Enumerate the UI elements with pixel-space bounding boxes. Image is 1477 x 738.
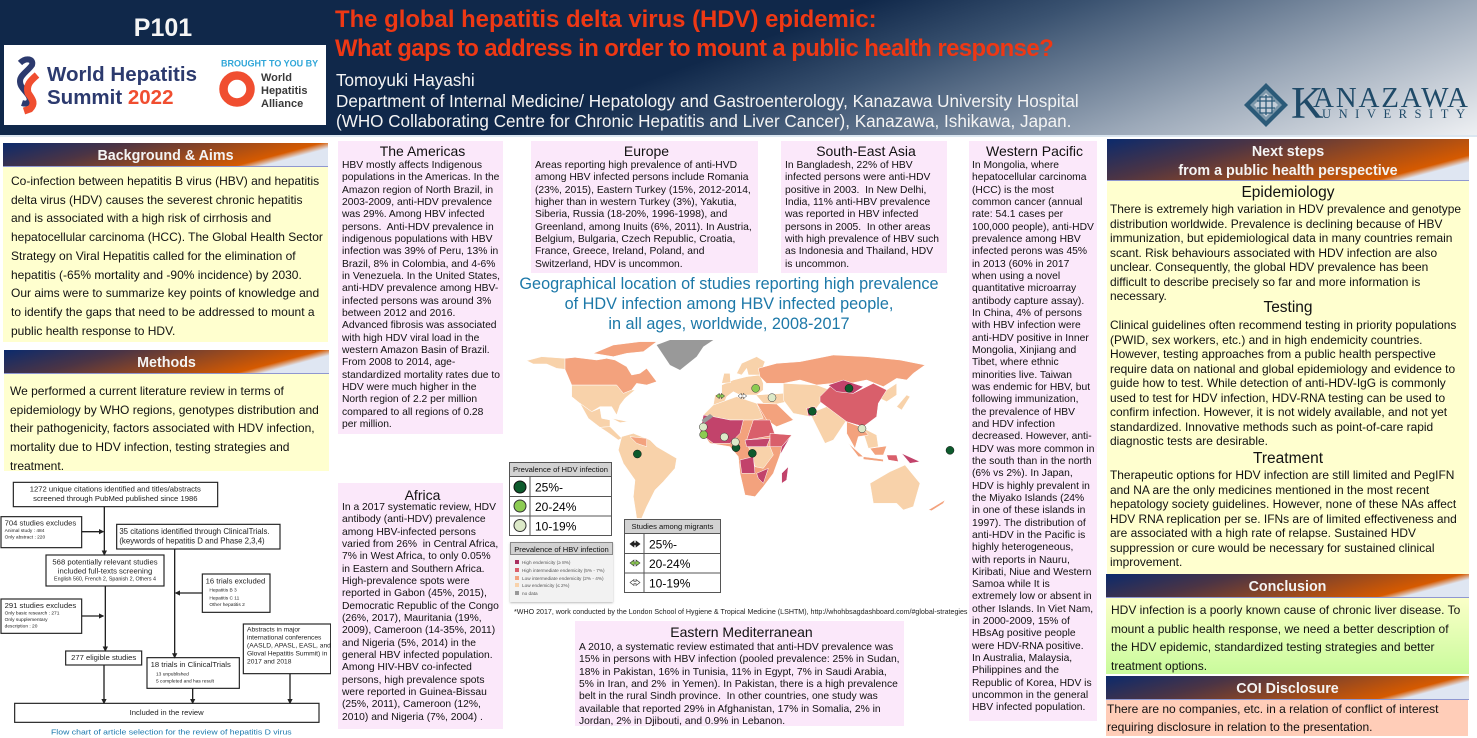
land: low intermediate endemicity <box>565 342 945 511</box>
flow chart of article selection: 704 studies excludes <box>5 518 76 527</box>
panel: Western Pacific: highly heterogeneous, <box>972 542 1073 553</box>
text: testing: Clinical guidelines often recommend testing in priority populations <box>1110 318 1456 332</box>
panel: Eastern Mediterranean: belt in the rural Sindh province. In other countries, one study was <box>579 691 878 702</box>
flow chart of article selection: 35 citations identified through ClinicalTrials. <box>119 527 270 536</box>
logo panel: World Hepatitis Summit 2022: Alliance <box>261 98 303 110</box>
panel: Western Pacific: Mongolia, Xinjiang and <box>972 345 1076 356</box>
panel: Western Pacific: was endemic for HBV, but <box>972 382 1090 393</box>
panel: Western Pacific: (6% vs 2%). In Japan, <box>972 468 1073 479</box>
panel: Eastern Mediterranean: Jordan, 2% in Djibouti, and 0.9% in Lebanon. <box>579 716 785 727</box>
panel: conclusion: treatment options. <box>1111 659 1207 673</box>
flow chart of article selection: (AASLD, APASL, EASL, and <box>247 643 331 650</box>
panel: Africa: (26%, 2017), Mauritania (19%, <box>342 613 482 624</box>
panel: Western Pacific: In Mongolia, where <box>972 160 1059 171</box>
flow chart of article selection: 2017 and 2018 <box>247 659 292 666</box>
panel: Western Pacific: in 2013 (60% in 2017 <box>972 259 1069 270</box>
authors and affiliation: Department of Internal Medicine/ Hepatology and Gastroenterology, Kanazawa University Hospital <box>336 92 1079 110</box>
flow chart of article selection: Only basic research : 271 <box>5 611 60 617</box>
logo panel: World Hepatitis Summit 2022: World <box>261 72 292 84</box>
legend: studies among migrants: 10-19% <box>649 576 691 590</box>
text: testing: require data on national and global epidemiology and evidence to <box>1110 362 1455 376</box>
panel: The Americas: infection was 39% of Peru, 13% in <box>342 246 498 257</box>
legend: prevalence of HBV infection: no data <box>522 591 538 596</box>
heading: Next steps: from a public health perspective <box>1178 162 1398 178</box>
text: treatment: are associated with a high rate of relapse. Sustained HDV <box>1110 526 1416 540</box>
text: epidemiology: immunization, but epidemiological data in many countries remain <box>1110 231 1452 245</box>
panel: Western Pacific: following immunization, <box>972 394 1078 405</box>
flow chart of article selection: international conferences <box>247 635 322 642</box>
text: epidemiology: distribution worldwide. Prevalence is declining because of HBV <box>1110 217 1442 231</box>
panel: methods text: epidemiology by WHO regions, genotypes distribution and <box>10 403 319 417</box>
panel: Western Pacific: HBV infected population. <box>972 702 1085 713</box>
panel: Africa: High-prevalence spots were <box>342 576 470 587</box>
panel: The Americas: populations in the Americas. In the <box>342 172 499 183</box>
text: treatment: suppression or cure would be necessary for sustained clinical <box>1110 541 1434 555</box>
panel: The Americas: compared to all regions of 0.28 <box>342 407 483 418</box>
panel: Africa: among HBV-infected persons <box>342 527 476 538</box>
panel: The Americas: persons. Anti-HDV prevalence in <box>342 222 494 233</box>
flow chart of article selection: Only abstract : 220 <box>5 534 46 540</box>
panel: South-East Asia <box>781 141 947 273</box>
flow chart of article selection: Hepatitis B 3 <box>209 588 237 594</box>
panel: South-East Asia: as Indonesia and Thailand, HDV <box>785 246 933 257</box>
panel: Western Pacific: uncommon in the general <box>972 690 1088 701</box>
panel: background and aims text: Strategy on Viral Hepatitis called for the elimination of <box>11 249 296 263</box>
panel: Western Pacific: In China, 4% of persons <box>972 308 1082 319</box>
no data: Western Sahara <box>702 414 713 423</box>
subheading: Treatment: Treatment <box>1253 450 1323 467</box>
heading: Eastern Mediterranean: Eastern Mediterranean <box>670 624 813 640</box>
legend: prevalence of HBV infection: Low intermediate endemicity (2% - 4%) <box>522 576 604 581</box>
panel: Western Pacific: minorities live. Taiwan <box>972 370 1072 381</box>
text: testing: However, testing approaches from a public health perspective <box>1110 347 1436 361</box>
panel: methods text: We performed a current literature review in terms of <box>10 384 284 398</box>
panel: Western Pacific: hepatocellular carcinoma <box>972 172 1086 183</box>
legend: prevalence of HBV infection: Low endemicity (≤ 2%) <box>522 583 570 588</box>
panel: The Americas: Brazil, 8% in Colombia, and 4-6% <box>342 259 495 270</box>
panel: South-East Asia: persons in 2005. In other areas <box>785 222 930 233</box>
panel: methods text <box>4 374 329 471</box>
flow chart of article selection: 13 unpublished <box>156 671 189 677</box>
panel: Europe: France, Greece, Ireland, Poland, and <box>535 246 704 257</box>
panel: Western Pacific: rate: 54.1 cases per <box>972 209 1063 220</box>
heading: South-East Asia: South-East Asia <box>816 143 916 159</box>
flow chart of article selection: 18 trials in ClinicalTrials <box>151 660 231 669</box>
panel: South-East Asia: India, 11% anti-HBV prevalence <box>785 197 930 208</box>
flow chart of article selection: 16 trials excluded <box>206 577 265 586</box>
legend: studies among migrants: 20-24% <box>649 557 691 571</box>
panel: The Americas: indigenous populations with HBV <box>342 234 493 245</box>
panel: Europe: higher than in western Turkey (3%), Yakutia, <box>535 197 737 208</box>
flow chart of article selection <box>0 482 331 736</box>
heading: COI Disclosure: COI Disclosure <box>1236 681 1339 697</box>
map title <box>519 275 939 333</box>
authors and affiliation: (WHO Collaborating Centre for Chronic Hepatitis and Liver Cancer), Kanazawa, Ishikawa, Japan. <box>336 112 1071 131</box>
logo panel: World Hepatitis Summit 2022: Hepatitis <box>261 85 307 97</box>
text: epidemiology: There is extremely high variation in HDV prevalence and genotype <box>1110 202 1461 216</box>
text: epidemiology: necessary. <box>1110 289 1167 303</box>
panel: Western Pacific: Kiribati, Niue and Western <box>972 567 1091 578</box>
panel: Western Pacific: extremely low or absent in <box>972 591 1092 602</box>
heading: Methods: Methods <box>137 355 196 371</box>
panel: COI disclosure: There are no companies, etc. in a relation of conflict of interest <box>1107 702 1439 716</box>
panel: Western Pacific: decreased. However, anti- <box>972 431 1092 442</box>
panel: The Americas: between 2012 and 2016. <box>342 308 455 319</box>
legend: prevalence of HBV infection <box>510 542 613 602</box>
panel: Africa: In a 2017 systematic review, HDV <box>342 502 496 513</box>
panel: Western Pacific: 1997). The distribution of <box>972 518 1086 529</box>
panel: Eastern Mediterranean: 5% in Iran, and 2% in Yemen). In Pakistan, there is a high prevalence <box>579 679 898 690</box>
panel: Western Pacific: quantitative microarray <box>972 283 1076 294</box>
panel: South-East Asia: was reported in HBV infected <box>785 209 918 220</box>
panel: Europe: Areas reporting high prevalence of anti-HVD <box>535 160 737 171</box>
header banner <box>0 0 1477 137</box>
panel: Europe: Belgium, Bulgaria, Czech Republic, Croatia, <box>535 234 735 245</box>
heading: The Americas: The Americas <box>380 143 465 159</box>
panel: South-East Asia: with high prevalence of HBV such <box>785 234 939 245</box>
text: testing: used to test for HDV infection, HDV-RNA testing can be used to <box>1110 391 1445 405</box>
logo panel: World Hepatitis Summit 2022: World Hepatitis <box>47 63 197 86</box>
panel: Western Pacific: with HBV infection were <box>972 320 1081 331</box>
text: testing <box>1110 318 1456 448</box>
legend: studies among migrants: Studies among migrants <box>632 522 713 531</box>
panel: Eastern Mediterranean: available that reported 29% in Afghanistan, 17% in Somalia, 2% in <box>579 704 881 715</box>
heading: Next steps: Next steps <box>1252 144 1324 160</box>
panel: Africa: varied from 26% in Central Africa, <box>342 539 498 550</box>
panel: The Americas <box>338 141 503 434</box>
text: testing: standardized. Innovative methods such as point-of-care rapid <box>1110 420 1433 434</box>
logo panel: World Hepatitis Summit 2022: Summit 2022 <box>47 86 173 109</box>
panel: background and aims text: delta virus (HDV) causes the severest chronic hepatitis <box>11 193 302 207</box>
flow chart of article selection: screened through PubMed published since 1986 <box>33 494 197 503</box>
panel: Africa: and Nigeria (5%, 2014) in the <box>342 638 476 649</box>
heading: Background & Aims: Background & Aims <box>97 148 234 164</box>
authors and affiliation: Tomoyuki Hayashi <box>336 71 475 90</box>
subheading: Testing: Testing <box>1263 299 1313 316</box>
legend: prevalence of HBV infection: Prevalence of HBV infection <box>514 545 609 554</box>
study markers: 20-24% <box>700 384 760 439</box>
title: The global hepatitis delta virus (HDV) epidemic: <box>335 6 877 33</box>
flow chart of article selection: 568 potentially relevant studies <box>52 557 158 566</box>
panel: Africa: in Eastern and Southern Africa. <box>342 564 485 575</box>
land: low endemicity <box>527 357 920 518</box>
map source note: *WHO 2017, work conducted by the London School of Hygiene & Tropical Medicine (LSHTM), http://whohbsagdashboard.com/#global-strategies <box>514 608 967 616</box>
map title: in all ages, worldwide, 2008-2017 <box>608 315 850 333</box>
panel: The Americas: anti-HDV prevalence among HBV- <box>342 283 498 294</box>
panel: The Americas: From 2008 to 2014, age- <box>342 357 455 368</box>
panel: background and aims text: Our aims were to summarize key points of knowledge and <box>11 286 319 300</box>
panel: The Americas: per million. <box>342 419 392 430</box>
heading: Western Pacific: Western Pacific <box>986 143 1083 159</box>
panel: The Americas: HDV were much higher in the <box>342 382 476 393</box>
text: treatment: improvement. <box>1110 555 1182 569</box>
panel: The Americas: western Amazon Basin of Brazil. <box>342 345 490 356</box>
flow chart of article selection: 291 studies excludes <box>5 601 76 610</box>
panel: background and aims text: Co-infection between hepatitis B virus (HBV) and hepatitis <box>11 174 319 188</box>
north Africa: low endemicity <box>703 397 763 420</box>
panel: Africa: 2010) and Nigeria (7%, 2004) . <box>342 712 483 723</box>
flow chart of article selection: (keywords of hepatitis D and Phase 2,3,4) <box>119 536 265 545</box>
panel: Western Pacific: common cancer (annual <box>972 197 1082 208</box>
panel: Western Pacific: the south than in the north <box>972 456 1092 467</box>
map title: Geographical location of studies reporting high prevalence <box>519 275 939 293</box>
panel: The Americas: with high HDV viral load in the <box>342 333 479 344</box>
land: high intermediate endemicity <box>747 383 898 462</box>
panel: Western Pacific: with reports in Nauru, <box>972 554 1070 566</box>
panel: methods text: their pathogenicity, factors associated with HDV infection, <box>10 421 315 435</box>
panel: South-East Asia: In Bangladesh, 22% of HBV <box>785 160 913 171</box>
logo panel: World Hepatitis Summit 2022 <box>4 45 326 125</box>
legend: studies among migrants: 25%- <box>649 538 677 552</box>
legend: prevalence of HDV infection <box>509 462 612 536</box>
panel: Western Pacific: infected perons was 45% <box>972 246 1087 257</box>
panel: The Americas: 2003-2009, anti-HDV prevalence <box>342 197 492 208</box>
logo: Kanazawa University: UNIVERSITY <box>1322 107 1465 121</box>
panel: Western Pacific: HDV is highly prevalent in <box>972 481 1090 492</box>
panel: Western Pacific: and HDV infection <box>972 419 1055 430</box>
no data: Greenland <box>657 340 713 370</box>
flow chart of article selection: included full-texts screening <box>58 567 152 576</box>
panel: Western Pacific: anti-HDV in the Pacific is <box>972 530 1085 541</box>
panel: South-East Asia: infected persons were anti-HDV <box>785 172 930 183</box>
panel: background and aims text: hepatocellular carcinoma (HCC). The Global Health Sector <box>11 230 323 244</box>
panel: Western Pacific: the Miyako Islands (24% <box>972 493 1084 504</box>
panel: The Americas: standardized mortality rates due to <box>342 370 500 381</box>
map title: of HDV infection among HBV infected people, <box>565 295 893 313</box>
panel: The Americas: Advanced fibrosis was associated <box>342 320 497 331</box>
panel: Western Pacific: Republic of Korea, HDV is <box>972 678 1092 689</box>
panel: background and aims text: to identify the gaps that need to be addressed to mount a <box>11 305 315 319</box>
panel: Africa: general HBV infected population. <box>342 650 493 661</box>
text: testing: guide how to test. While detection of anti-HDV-IgG is commonly <box>1110 376 1446 390</box>
heading: Background & Aims <box>3 143 328 167</box>
panel: The Americas: Amazon region of North Brazil, in <box>342 185 493 196</box>
text: epidemiology <box>1110 202 1461 303</box>
text: testing: (PWID, sex workers, etc.) and in high endemicity countries. <box>1110 333 1422 347</box>
study markers: 10-19% <box>699 394 866 446</box>
panel: Western Pacific: anti-HDV positive in Inner <box>972 333 1089 344</box>
panel: Africa: antibody (anti-HDV) prevalence <box>342 514 486 525</box>
flow chart of article selection: Animal study : 484 <box>5 528 45 534</box>
heading: Conclusion: Conclusion <box>1249 579 1326 595</box>
heading: Africa: Africa <box>405 487 440 503</box>
panel: Africa: 7% in West Africa, to only 0.05% <box>342 551 491 562</box>
text: epidemiology: scant. Risk behaviours associated with HDV infection are also <box>1110 246 1437 260</box>
panel: background and aims text: hepatitis (-65% mortality and -90% incidence) by 2030. <box>11 268 302 282</box>
logo: Kanazawa University: K <box>1291 78 1324 128</box>
flow chart of article selection: Hepatitis C 11 <box>209 595 240 601</box>
panel: conclusion: the HDV epidemic, standardized testing strategies and better <box>1111 640 1435 654</box>
panel: Europe <box>531 141 758 273</box>
title: What gaps to address in order to mount a public health response? <box>335 35 1053 62</box>
panel: background and aims text: and is associated with a high risk of cirrhosis and <box>11 211 271 225</box>
panel: Western Pacific: 100,000 people), anti-HDV <box>972 222 1094 233</box>
flow chart of article selection: 1272 unique citations identified and titles/abstracts <box>30 485 201 494</box>
panel: Western Pacific: (HCC) is the most <box>972 185 1054 196</box>
panel: Europe: Greenland, among Inuits (6%, 2011). In Austria, <box>535 222 752 233</box>
panel: Africa: persons, high prevalence spots <box>342 675 485 686</box>
central and eastern Africa: low endemicity <box>748 447 773 468</box>
text: treatment <box>1110 468 1457 569</box>
legend: prevalence of HDV infection: 25%- <box>535 480 563 494</box>
world map <box>527 340 954 518</box>
heading: Europe: Europe <box>624 143 669 159</box>
text: testing: diagnostic tests are desirable. <box>1110 434 1268 448</box>
panel: Africa: Democratic Republic of the Congo <box>342 601 499 612</box>
authors and affiliation <box>336 71 1079 131</box>
flow chart of article selection: 277 eligible studies <box>71 653 136 662</box>
panel: Eastern Mediterranean: 18% in Pakistan, 16% in Tunisia, 11% in Egypt, 7% in Saudi Arabia, <box>579 667 887 678</box>
flow chart of article selection: Abstracts in major <box>247 626 301 633</box>
text: treatment: HDV RNA replication per se. IFNs are of limited effectiveness and <box>1110 512 1457 526</box>
panel: COI disclosure: requiring disclosure in relation to the presentation. <box>1107 720 1372 734</box>
panel: The Americas: North region of 2.2 per million <box>342 394 477 405</box>
text: treatment: and NA are the only medicines mentioned in the most recent <box>1110 483 1429 497</box>
flow chart of article selection: Flow chart of article selection for the review of hepatitis D virus <box>51 727 292 736</box>
heading: COI Disclosure <box>1106 676 1469 700</box>
flow chart of article selection: English 560, French 2, Spanish 2, Others 4 <box>54 577 156 583</box>
heading: Next steps <box>1107 139 1469 181</box>
heading: Methods <box>4 350 329 374</box>
flow chart of article selection: Included in the review <box>130 708 204 717</box>
panel: Western Pacific: when using a novel <box>972 271 1060 282</box>
panel: conclusion: mount a public health response, we need a better description of <box>1111 622 1449 636</box>
migrant study arrows <box>716 393 747 399</box>
text: treatment: Therapeutic options for HDV infection are still limited and PegIFN <box>1110 468 1454 482</box>
legend: prevalence of HBV infection: High endemicity (≥ 8%) <box>522 560 571 565</box>
legend: prevalence of HBV infection: High intermediate endemicity (5% - 7%) <box>522 568 605 573</box>
panel: The Americas: infected persons was around 3% <box>342 296 491 307</box>
panel: Western Pacific: antibody capture assay). <box>972 296 1084 307</box>
panel: Africa <box>338 483 503 729</box>
panel: The Americas: HBV mostly affects Indigenous <box>342 160 482 171</box>
panel: Western Pacific: In Australia, Malaysia, <box>972 653 1072 664</box>
panel: Western Pacific: Tibet, where ethnic <box>972 357 1059 368</box>
panel: next steps <box>1107 181 1469 574</box>
panel: Europe: (23%, 2015), Eastern Turkey (15%, 2012-2014, <box>535 185 751 196</box>
legend: studies among migrants <box>624 519 721 593</box>
land: high endemicity <box>700 380 920 483</box>
panel: Western Pacific: HBsAg positive people <box>972 628 1076 639</box>
flow chart of article selection: Other hepatitis 2 <box>209 602 245 608</box>
panel: Africa: reported in Gabon (45%, 2015), <box>342 588 487 599</box>
flow chart of article selection: description : 20 <box>5 623 38 629</box>
panel: methods text: mortality due to HDV infection, testing strategies and <box>10 440 289 454</box>
panel: Eastern Mediterranean: 15% in persons with HBV infection (pooled prevalence: 25% in Sudan, <box>579 654 900 665</box>
panel: Eastern Mediterranean <box>575 621 904 726</box>
panel: Western Pacific: prevalence among HBV <box>972 234 1081 245</box>
panel: Africa: (25%, 2011), Cameroon (12%, <box>342 699 481 710</box>
text: epidemiology: difficult to describe precisely so far and more information is <box>1110 275 1420 289</box>
panel: Europe: Siberia, Russia (18-20%, 1996-1998), and <box>535 209 727 220</box>
panel: methods text: treatment. <box>10 459 64 473</box>
flow chart of article selection: Gloval Hepatitis Summit) in <box>247 651 328 658</box>
study markers: 25%- <box>633 384 954 458</box>
panel: Western Pacific: Philippines and the <box>972 665 1059 676</box>
heading: Conclusion <box>1106 574 1469 598</box>
flow chart of article selection: 5 completed and has result <box>156 679 215 685</box>
panel: COI disclosure <box>1106 700 1468 736</box>
panel: Western Pacific: were HDV-RNA positive. <box>972 641 1084 652</box>
panel: Western Pacific: other Islands. In Viet Nam, <box>972 604 1093 615</box>
legend: prevalence of HDV infection: 10-19% <box>535 520 577 534</box>
text: epidemiology: unclear. Consequently, the global HDV prevalence has been <box>1110 260 1428 274</box>
legend: prevalence of HDV infection: 20-24% <box>535 500 577 514</box>
flow chart of article selection: Only supplementary <box>5 617 48 623</box>
panel: background and aims text <box>3 167 328 342</box>
legend: prevalence of HDV infection: Prevalence of HDV infection <box>513 465 608 474</box>
panel: Africa: 2009), Cameroon (14-35%, 2011) <box>342 625 495 636</box>
logo: Kanazawa University: ANAZAWA <box>1313 82 1468 114</box>
panel: South-East Asia: positive in 2003. In New Delhi, <box>785 185 926 196</box>
panel: Western Pacific <box>969 141 1097 721</box>
panel: Western Pacific: Samoa while It is <box>972 579 1050 590</box>
text: testing: confirm infection. However, it is not widely available, and not yet <box>1110 405 1447 419</box>
poster number: P101 <box>134 14 192 42</box>
panel: Western Pacific: HDV was more common in <box>972 444 1094 455</box>
text: treatment: hepatology society guidelines. However, none of these NAs affect <box>1110 497 1456 511</box>
logo: Kanazawa University <box>1244 78 1468 128</box>
subheading: Epidemiology: Epidemiology <box>1241 184 1335 201</box>
panel: conclusion: HDV infection is a poorly known cause of chronic liver disease. To <box>1111 603 1460 617</box>
panel: The Americas: in Venezuela. In the United States, <box>342 271 500 282</box>
panel: background and aims text: public health response to HDV. <box>11 324 175 338</box>
panel: Eastern Mediterranean: A 2010, a systematic review estimated that anti-HDV prevalence was <box>579 642 893 653</box>
panel: Africa: were reported in Guinea-Bissau <box>342 687 487 698</box>
logo panel: World Hepatitis Summit 2022: BROUGHT TO YOU BY <box>221 58 318 68</box>
panel: Western Pacific: in 2000-2009, 15% of <box>972 616 1070 627</box>
panel: Western Pacific: the prevalence of HBV <box>972 407 1075 418</box>
panel: conclusion <box>1106 598 1469 674</box>
title <box>335 6 1053 62</box>
panel: Western Pacific: in one of these islands in <box>972 505 1085 516</box>
panel: Africa: Among HIV-HBV co-infected <box>342 662 472 673</box>
panel: The Americas: was 29%. Among HBV infected <box>342 209 485 220</box>
panel: Europe: among HBV infected persons include Romania <box>535 172 748 183</box>
panel: South-East Asia: is uncommon. <box>785 259 849 270</box>
panel: Europe: Switzerland, HDV is uncommon. <box>535 259 683 270</box>
